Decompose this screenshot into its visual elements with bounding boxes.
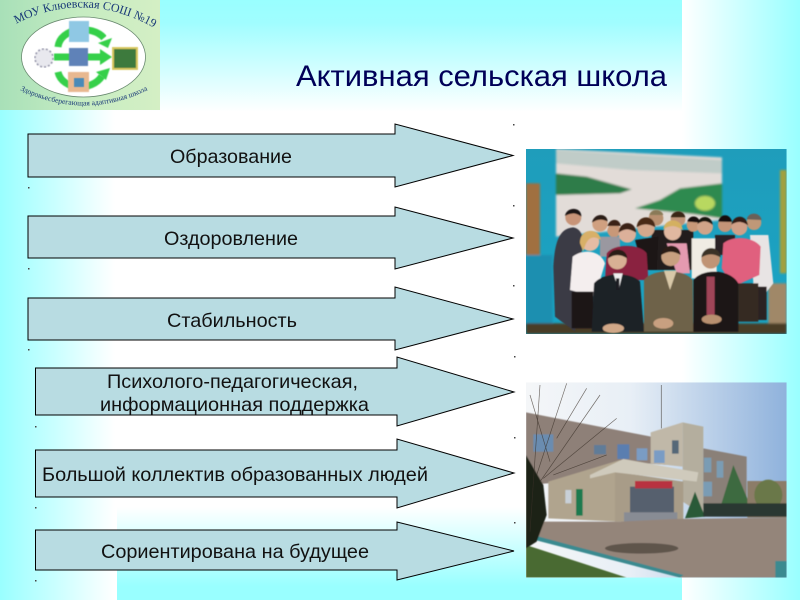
mural	[556, 149, 722, 237]
trees	[721, 465, 748, 504]
middle row	[637, 220, 655, 237]
front row	[608, 251, 627, 269]
arrow: Большой коллектив образованных людей	[36, 439, 514, 508]
icon: left globe figure	[35, 49, 53, 67]
entrance block	[548, 460, 620, 522]
logo bottom caption: Здоровьесберегающая адаптивная школа	[20, 86, 148, 108]
arrow: Образование: Образование	[170, 146, 292, 168]
logo: school emblem	[0, 0, 160, 110]
arrow: Оздоровление	[28, 207, 513, 269]
yard	[537, 518, 787, 578]
title: Активная сельская школа	[296, 60, 667, 93]
arrow: Стабильность: Стабильность	[167, 310, 297, 332]
main wing	[526, 412, 668, 485]
icon: arrow heads	[96, 38, 112, 80]
arrow: Психолого-педагогическая, информационная поддержка: Психолого-педагогическая,	[107, 371, 358, 393]
icon: right computer tile	[113, 48, 137, 69]
dark tree at left	[526, 455, 547, 548]
arrow: Психолого-педагогическая, информационная поддержка: информационная поддержка	[100, 394, 369, 416]
arrow: Психолого-педагогическая, информационная поддержка	[36, 357, 514, 426]
icon: blue book tile	[69, 21, 89, 42]
icon: lower orange tile	[68, 72, 89, 92]
arrow: Сориентирована на будущее	[36, 522, 514, 580]
door	[526, 183, 540, 255]
arrow: Большой коллектив образованных людей: Большой коллектив образованных людей	[42, 464, 428, 486]
back row	[553, 227, 583, 332]
arrow: Образование	[28, 124, 513, 187]
photo: school building	[526, 382, 787, 578]
icon: centre people tile	[69, 48, 88, 66]
arrow: Стабильность	[28, 287, 513, 350]
arrow: Сориентирована на будущее: Сориентирована на будущее	[101, 541, 369, 563]
windows	[533, 434, 553, 452]
arrow: Оздоровление: Оздоровление	[164, 228, 298, 250]
icon: green cycle arrows	[54, 30, 104, 87]
photo: staff group portrait	[526, 149, 787, 334]
